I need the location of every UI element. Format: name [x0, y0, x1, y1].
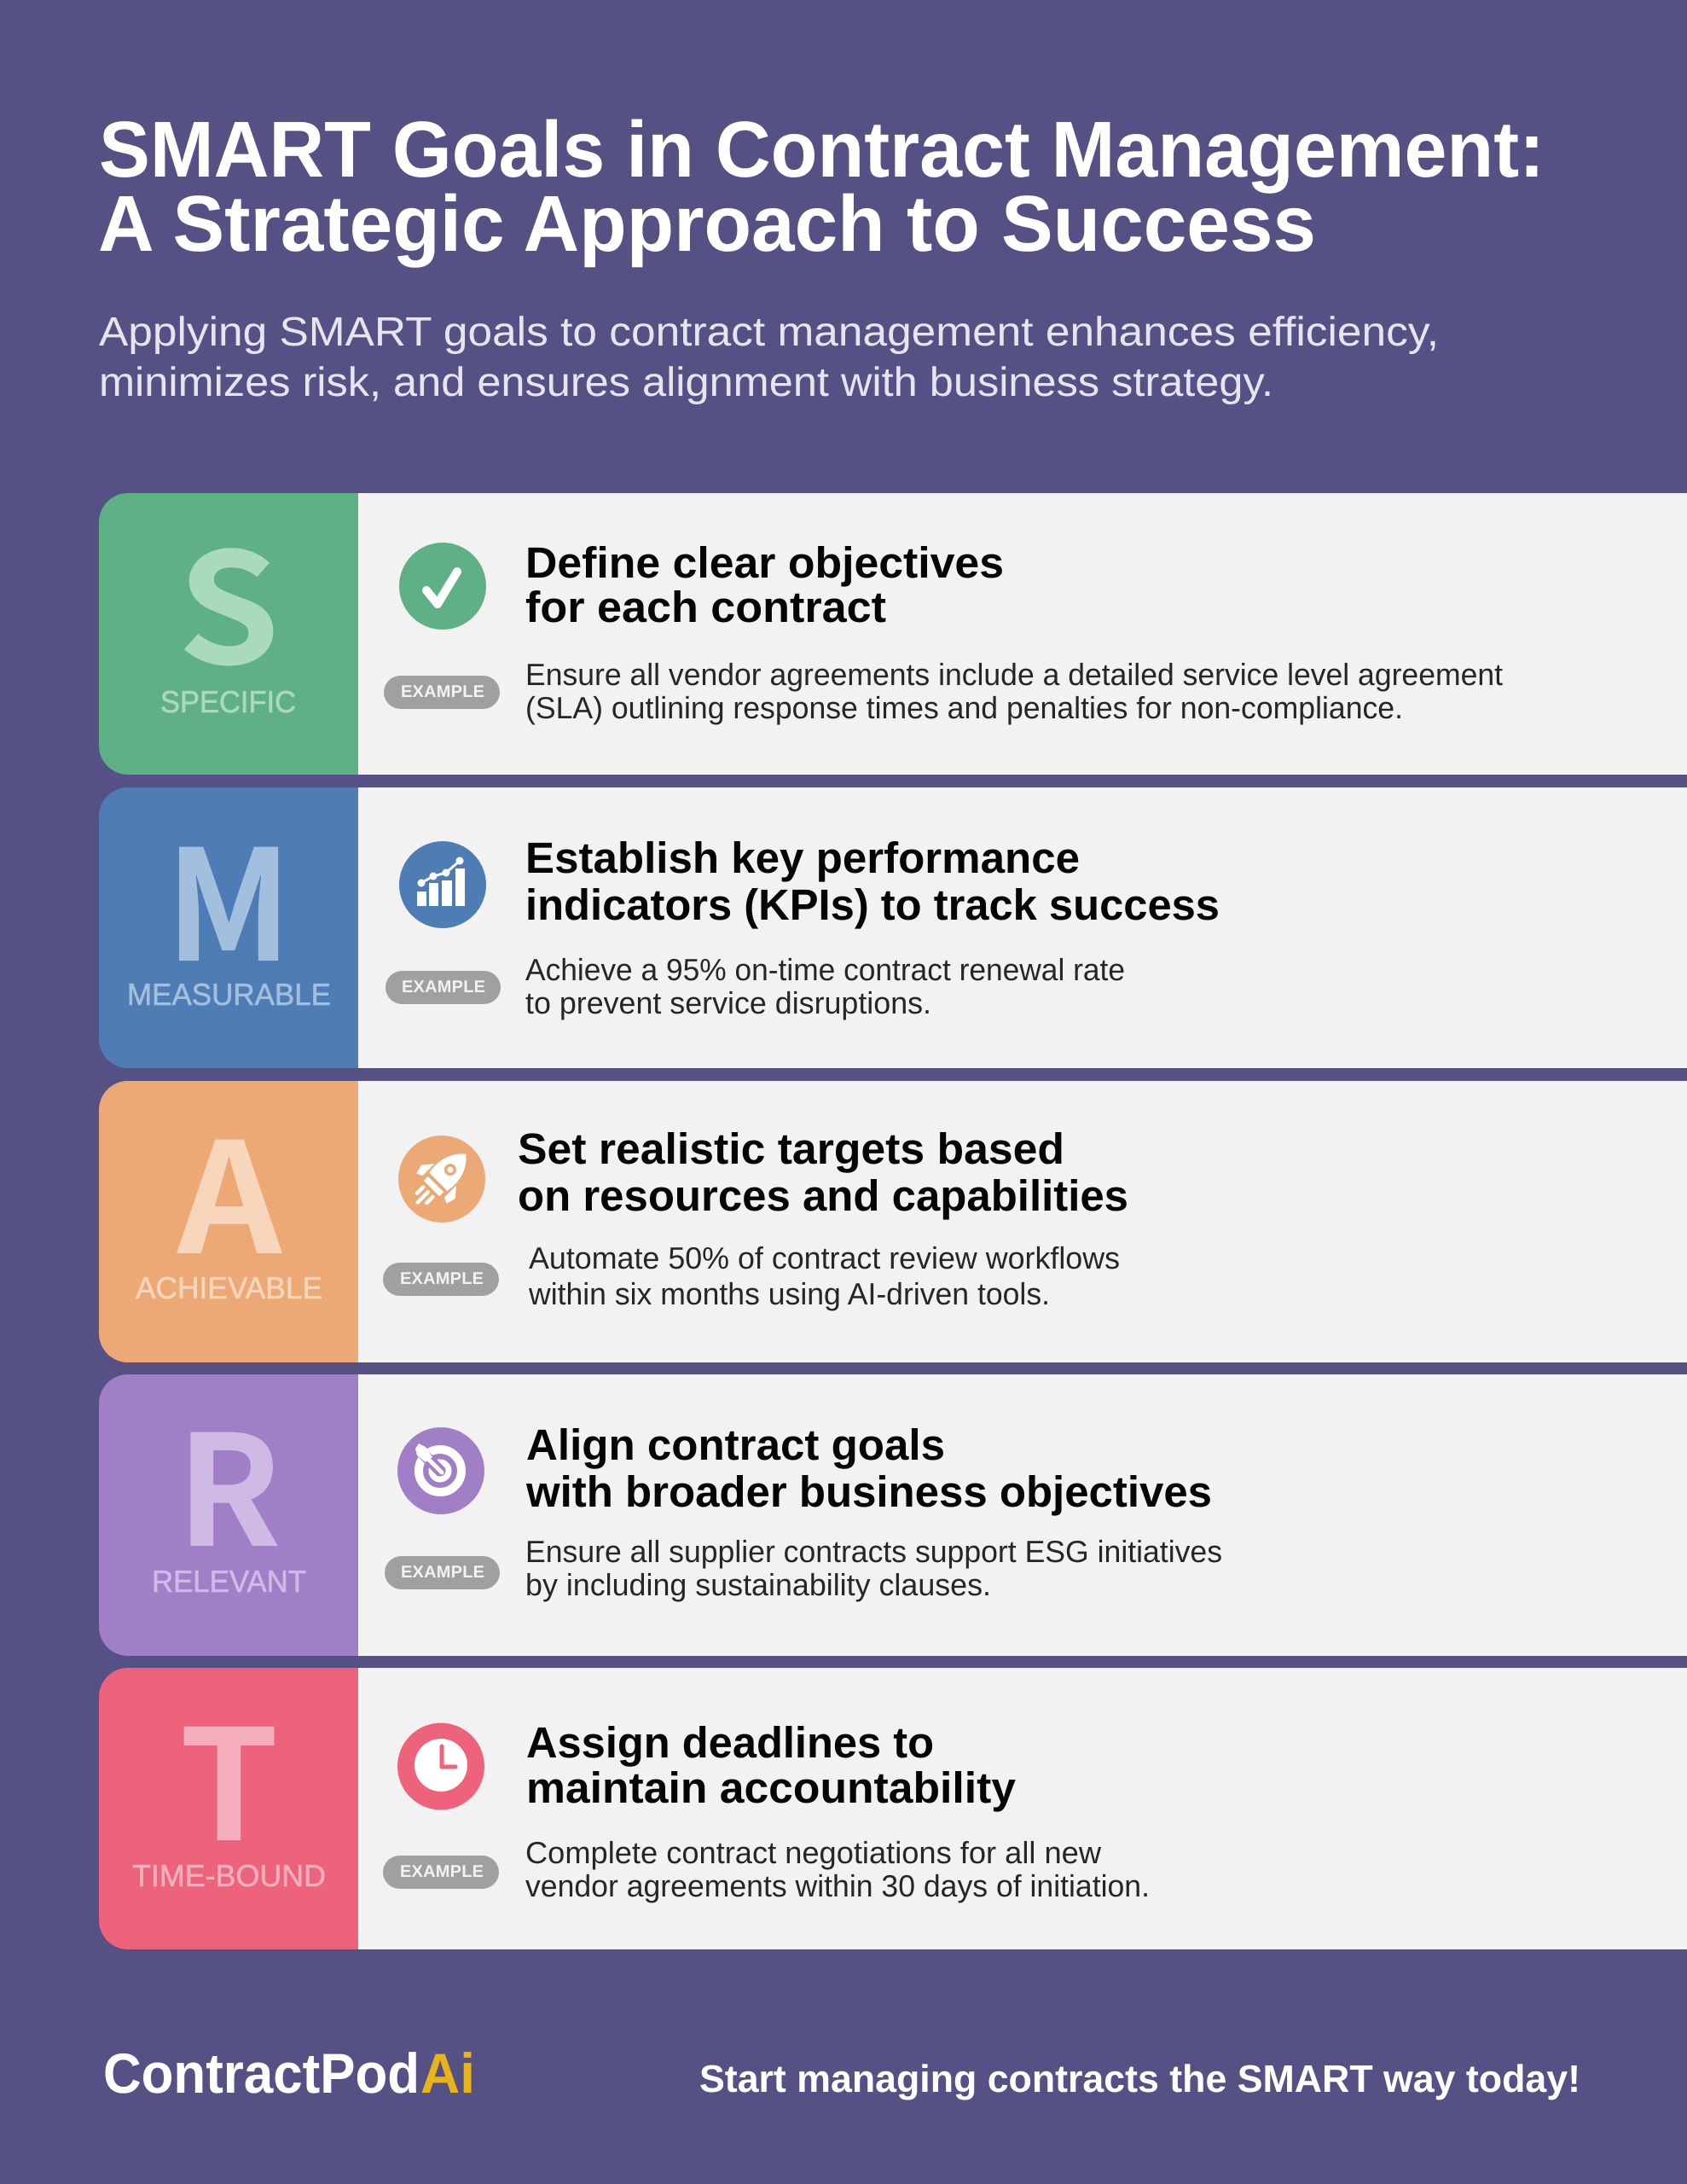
letter block: T: TIME-BOUND	[132, 1858, 326, 1893]
letter block: S: SPECIFIC	[160, 684, 296, 719]
letter block: R	[99, 1368, 358, 1656]
icon: growth chart	[399, 841, 486, 928]
example text: measurable	[525, 952, 1125, 1020]
letter block: M: MEASURABLE	[127, 977, 331, 1012]
heading: time-bound: maintain accountability	[526, 1763, 1017, 1812]
example badge: EXAMPLE	[401, 1563, 484, 1582]
subtitle: Applying SMART goals to contract management enhances efficiency,	[99, 310, 1439, 355]
example text: relevant	[525, 1534, 1222, 1602]
icon: rocket	[398, 1136, 485, 1223]
panel: time-bound	[99, 1662, 1687, 1949]
heading: relevant: Align contract goals	[526, 1420, 945, 1469]
example badge: EXAMPLE	[402, 978, 485, 996]
heading: achievable: Set realistic targets based	[518, 1124, 1064, 1173]
example text: achievable: within six months using AI-driven tools.	[528, 1276, 1050, 1311]
letter block: S	[99, 485, 358, 775]
example text: time-bound: Complete contract negotiations for all new	[525, 1835, 1102, 1870]
letter block: T	[99, 1662, 358, 1949]
call to action: Start managing contracts the SMART way today!	[699, 2057, 1580, 2100]
heading: specific: Define clear objectives	[525, 538, 1004, 587]
example badge	[385, 1556, 500, 1589]
heading: achievable: on resources and capabilities	[518, 1171, 1128, 1220]
example text: measurable: to prevent service disruptions.	[525, 985, 931, 1020]
title: A Strategic Approach to Success	[98, 179, 1316, 268]
panel: relevant	[99, 1368, 1687, 1656]
icon: clock	[397, 1723, 484, 1810]
heading: relevant: with broader business objectives	[525, 1467, 1212, 1516]
panel: measurable	[99, 782, 1687, 1068]
logo: ContractPodAi: ContractPod	[103, 2042, 420, 2105]
example text: achievable: Automate 50% of contract review workflows	[529, 1240, 1120, 1275]
icon: target with arrow	[397, 1427, 484, 1514]
example badge: EXAMPLE	[401, 682, 484, 701]
heading: time-bound: Assign deadlines to	[526, 1718, 934, 1767]
panel: achievable	[99, 1075, 1687, 1362]
heading: measurable: indicators (KPIs) to track success	[525, 880, 1220, 929]
letter block: A: A	[177, 1075, 283, 1298]
heading: time-bound	[526, 1718, 1017, 1812]
heading: achievable	[518, 1124, 1128, 1220]
heading: specific	[525, 538, 1004, 631]
icon: check mark	[399, 543, 486, 630]
example badge	[383, 1856, 499, 1889]
logo: ContractPodAi: Ai	[420, 2042, 475, 2105]
example text: specific: Ensure all vendor agreements include a detailed service level agreement	[525, 657, 1503, 692]
letter block: R: RELEVANT	[152, 1564, 306, 1599]
letter block: M	[99, 782, 358, 1068]
example badge	[384, 676, 500, 709]
subtitle: minimizes risk, and ensures alignment with business strategy.	[99, 360, 1273, 405]
example text: achievable	[528, 1240, 1120, 1311]
letter block: R: R	[177, 1368, 281, 1590]
example text: specific: (SLA) outlining response times and penalties for non-compliance.	[525, 690, 1403, 725]
letter block: A: ACHIEVABLE	[136, 1270, 322, 1305]
subtitle	[99, 310, 1439, 405]
heading: measurable	[525, 834, 1220, 929]
heading: specific: for each contract	[525, 583, 886, 631]
example badge	[386, 971, 501, 1004]
letter block: T: T	[179, 1662, 279, 1885]
panel: specific	[99, 485, 1687, 775]
example text: measurable: Achieve a 95% on-time contract renewal rate	[525, 952, 1125, 987]
title	[98, 105, 1545, 268]
example text: relevant: by including sustainability clauses.	[525, 1567, 991, 1602]
letter block: A	[99, 1075, 358, 1362]
example text: time-bound: vendor agreements within 30 days of initiation.	[525, 1868, 1150, 1903]
heading: relevant	[525, 1420, 1212, 1516]
letter block: M: M	[165, 782, 292, 1005]
example badge: EXAMPLE	[400, 1269, 484, 1288]
title: SMART Goals in Contract Management:	[99, 105, 1545, 194]
example text: specific	[525, 657, 1503, 725]
example text: relevant: Ensure all supplier contracts support ESG initiatives	[525, 1534, 1222, 1569]
example text: time-bound	[525, 1835, 1150, 1903]
example badge: EXAMPLE	[400, 1862, 484, 1881]
example badge	[383, 1263, 499, 1296]
letter block: S: S	[177, 485, 280, 708]
heading: measurable: Establish key performance	[525, 834, 1080, 882]
